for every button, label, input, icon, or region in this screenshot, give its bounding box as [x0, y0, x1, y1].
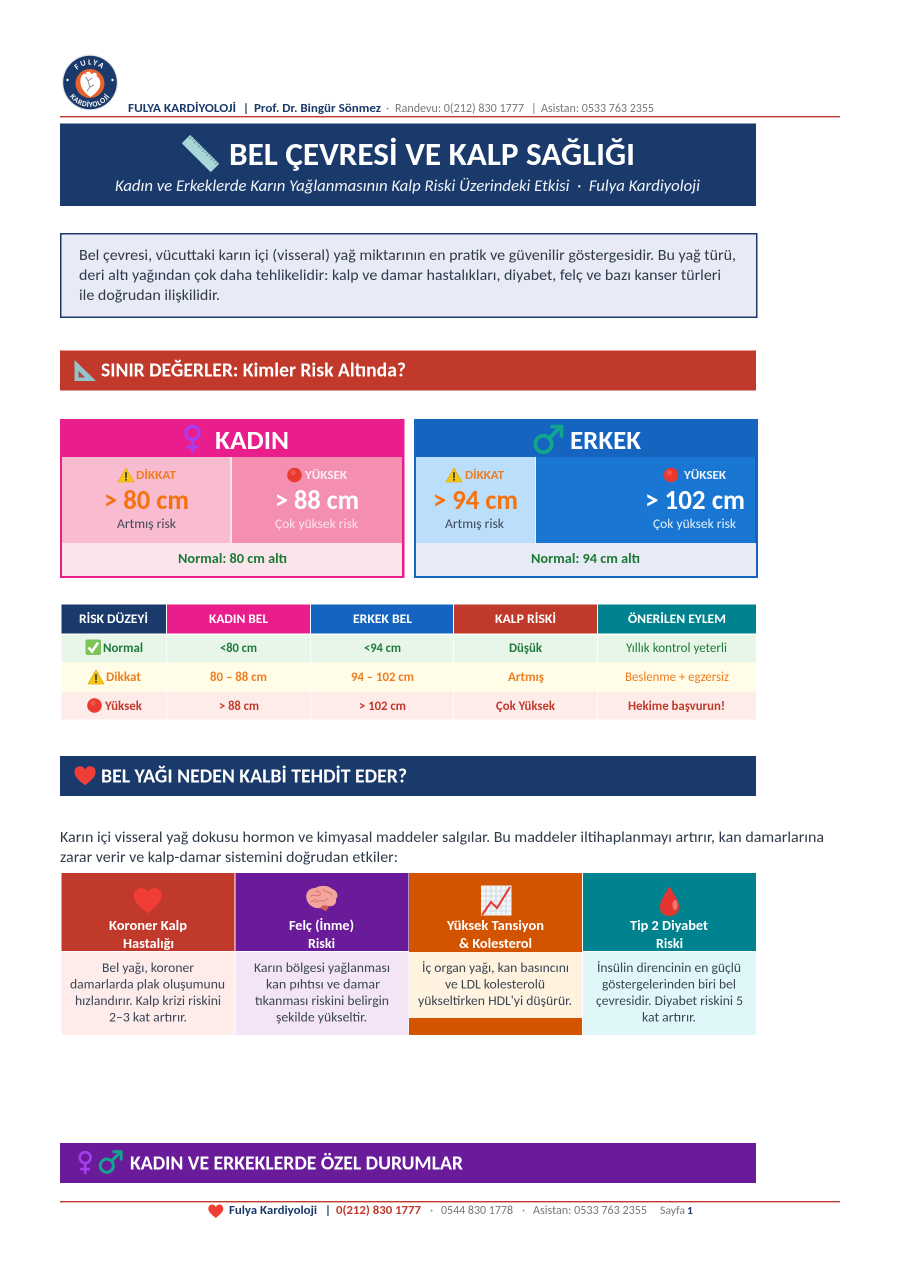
header: logo: KARDİYOLOJİ	[70, 94, 110, 107]
yüksek threshold: > 102 cm	[645, 484, 745, 517]
row: yüksek: > 102 cm	[359, 699, 406, 714]
card text: hızlandırır. Kalp krizi riskini	[75, 992, 221, 1009]
card text: Karın bölgesi yağlanması	[254, 959, 390, 976]
card: koroner kalp hastalığı	[62, 873, 234, 1035]
icon: male	[100, 1152, 121, 1172]
card title: Tip 2 Diyabet	[630, 916, 708, 934]
card: yüksek tansiyon ve kolesterol	[409, 873, 582, 1035]
header: contact line: |	[243, 101, 249, 116]
card title: Hastalığı	[123, 934, 174, 952]
section heading: sınır değerler	[60, 350, 756, 390]
card text: damarlarda plak oluşumunu	[70, 976, 225, 992]
card text: ve LDL kolesterolü	[445, 976, 545, 992]
table header: ERKEK BEL	[353, 612, 413, 627]
yüksek threshold: YÜKSEK	[683, 468, 726, 483]
yüksek threshold: > 88 cm	[275, 484, 359, 517]
dikkat threshold: Artmış risk	[117, 517, 176, 532]
card title	[446, 916, 544, 952]
body paragraph: zarar verir ve kalp-damar sistemini doğrudan etkiler:	[60, 849, 398, 867]
footer: 0(212) 830 1777	[336, 1203, 421, 1218]
row: yüksek: Hekime başvurun!	[628, 699, 725, 714]
row: yüksek: Yüksek	[104, 699, 143, 714]
row: yüksek: Çok Yüksek	[496, 699, 556, 714]
card title: Riski	[656, 934, 683, 952]
section heading: özel durumlar	[60, 1143, 756, 1183]
card text: çevresidir. Diyabet riskini 5	[596, 992, 743, 1009]
card: felç riski	[236, 873, 408, 1035]
dikkat threshold: > 94 cm	[433, 484, 518, 517]
icon: heart	[74, 766, 96, 785]
heading text: KADIN VE ERKEKLERDE ÖZEL DURUMLAR	[130, 1152, 464, 1176]
yüksek threshold	[275, 468, 359, 532]
dikkat threshold	[433, 468, 518, 532]
panel: erkek	[414, 419, 758, 578]
dikkat threshold: DİKKAT	[136, 468, 177, 483]
card title	[630, 916, 708, 952]
header: contact line: Asistan: 0533 763 2355	[541, 101, 654, 116]
header: contact line: Randevu: 0(212) 830 1777	[395, 101, 524, 116]
header: contact line: Prof. Dr. Bingür Sönmez	[254, 101, 381, 116]
row: dikkat: 80 – 88 cm	[210, 670, 267, 685]
header: contact line: FULYA KARDİYOLOJİ	[128, 101, 236, 116]
card text: şekilde yükseltir.	[276, 1008, 367, 1026]
normal range: Normal: 94 cm altı	[531, 550, 640, 567]
kadın heading: KADIN	[215, 424, 289, 456]
footer: ·	[522, 1203, 525, 1218]
dikkat threshold: Artmış risk	[445, 517, 504, 532]
icon: chart	[481, 886, 512, 916]
footer: ·	[430, 1203, 433, 1218]
heading text: SINIR DEĞERLER: Kimler Risk Altında?	[101, 358, 406, 382]
card text: 2–3 kat artırır.	[109, 1008, 187, 1026]
card text	[70, 959, 225, 1026]
header: contact line: |	[531, 101, 537, 116]
title: BEL ÇEVRESİ VE KALP SAĞLIĞI	[229, 135, 635, 174]
footer: |	[325, 1203, 331, 1218]
icon: blood drop	[660, 886, 679, 916]
row: normal: <80 cm	[220, 641, 257, 656]
intro text block: deri altı yağından çok daha tehlikelidir: kalp ve damar hastalıkları, diyabet, felç ve bazı kanser türleri	[79, 267, 721, 285]
yüksek threshold: Çok yüksek risk	[653, 517, 736, 532]
intro text block	[61, 234, 757, 317]
card title: Riski	[308, 934, 335, 952]
header: contact line: ·	[386, 101, 389, 116]
icon: warning	[118, 468, 134, 482]
card text: göstergelerinden biri bel	[602, 976, 736, 992]
body paragraph: Karın içi visseral yağ dokusu hormon ve kimyasal maddeler salgılar. Bu maddeler iltihaplanmayı artırır, kan damarlarına	[60, 829, 824, 847]
icon: warning	[446, 468, 462, 482]
panel: kadın	[60, 419, 404, 578]
dikkat threshold: DİKKAT	[465, 468, 505, 483]
row: dikkat: Artmış	[508, 670, 544, 685]
row: normal: <94 cm	[364, 641, 401, 656]
card title	[289, 916, 354, 952]
intro text block: Bel çevresi, vücuttaki karın içi (visseral) yağ miktarının en pratik ve güvenilir göstergesidir. Bu yağ türü,	[79, 247, 736, 265]
card title	[109, 916, 187, 952]
table header: RİSK DÜZEYİ	[79, 611, 148, 627]
title banner	[60, 124, 756, 206]
icon: female	[80, 1152, 91, 1174]
table header: KADIN BEL	[209, 612, 269, 627]
section heading: bel yağı	[60, 756, 756, 796]
footer: 1	[687, 1204, 693, 1218]
icon: red circle	[664, 468, 678, 482]
header: logo	[62, 54, 118, 110]
card text: kat artırır.	[642, 1008, 696, 1026]
card text: İnsülin direncinin en güçlü	[597, 959, 741, 976]
card text	[418, 959, 572, 1009]
yüksek threshold: YÜKSEK	[304, 468, 347, 483]
icon: heart	[208, 1205, 223, 1218]
icon: female	[186, 426, 199, 453]
table header: ÖNERİLEN EYLEM	[628, 611, 726, 627]
card title: Felç (İnme)	[289, 916, 354, 934]
footer: Fulya Kardiyoloji	[229, 1203, 317, 1218]
erkek heading: ERKEK	[570, 424, 642, 456]
normal range: Normal: 80 cm altı	[178, 550, 287, 567]
icon: red circle	[287, 468, 302, 482]
card: tip 2 diyabet riski	[583, 873, 756, 1035]
row: dikkat: 94 – 102 cm	[351, 670, 414, 685]
footer: Asistan: 0533 763 2355	[533, 1203, 647, 1218]
row: normal: Düşük	[509, 641, 543, 656]
icon: heart	[134, 888, 162, 913]
card text	[254, 959, 390, 1026]
dikkat threshold	[104, 468, 189, 532]
row: normal: Yıllık kontrol yeterli	[626, 641, 727, 656]
dikkat threshold: > 80 cm	[104, 484, 189, 517]
card text: kan pıhtısı ve damar	[266, 976, 380, 992]
row: yüksek	[62, 692, 756, 720]
icon: set square	[74, 360, 96, 381]
row: normal	[62, 635, 756, 662]
row: normal: Normal	[103, 641, 143, 656]
risk table	[62, 604, 756, 720]
heading text: BEL YAĞI NEDEN KALBİ TEHDİT EDER?	[101, 764, 407, 788]
card text	[596, 959, 743, 1026]
yüksek threshold: Çok yüksek risk	[275, 517, 358, 532]
table header	[62, 604, 756, 634]
table header: KALP RİSKİ	[495, 611, 556, 627]
footer: 0544 830 1778	[441, 1203, 513, 1218]
card text: tıkanması riskini belirgin	[255, 992, 389, 1009]
intro text block: ile doğrudan ilişkilidir.	[79, 287, 220, 305]
row: dikkat: Dikkat	[106, 670, 141, 685]
icon: ruler	[182, 135, 219, 172]
row: dikkat	[62, 662, 756, 692]
icon: male	[535, 426, 562, 452]
footer	[208, 1203, 693, 1218]
row: yüksek: > 88 cm	[219, 699, 259, 714]
icon: brain	[306, 886, 337, 911]
footer: Sayfa	[660, 1204, 685, 1218]
subtitle: Kadın ve Erkeklerde Karın Yağlanmasının Kalp Riski Üzerindeki Etkisi · Fulya Kardiyoloji	[115, 177, 700, 196]
card title: Yüksek Tansiyon	[446, 916, 544, 934]
card text: İç organ yağı, kan basıncını	[422, 959, 569, 976]
body paragraph	[60, 829, 824, 867]
card title: & Kolesterol	[459, 934, 532, 952]
card text: Bel yağı, koroner	[102, 959, 194, 976]
card title: Koroner Kalp	[109, 916, 187, 934]
row: dikkat: Beslenme + egzersiz	[625, 670, 729, 685]
header: logo: FULYA	[74, 59, 104, 70]
header: contact line	[128, 101, 654, 116]
yüksek threshold	[645, 468, 745, 532]
card text: yükseltirken HDL'yi düşürür.	[418, 992, 572, 1009]
